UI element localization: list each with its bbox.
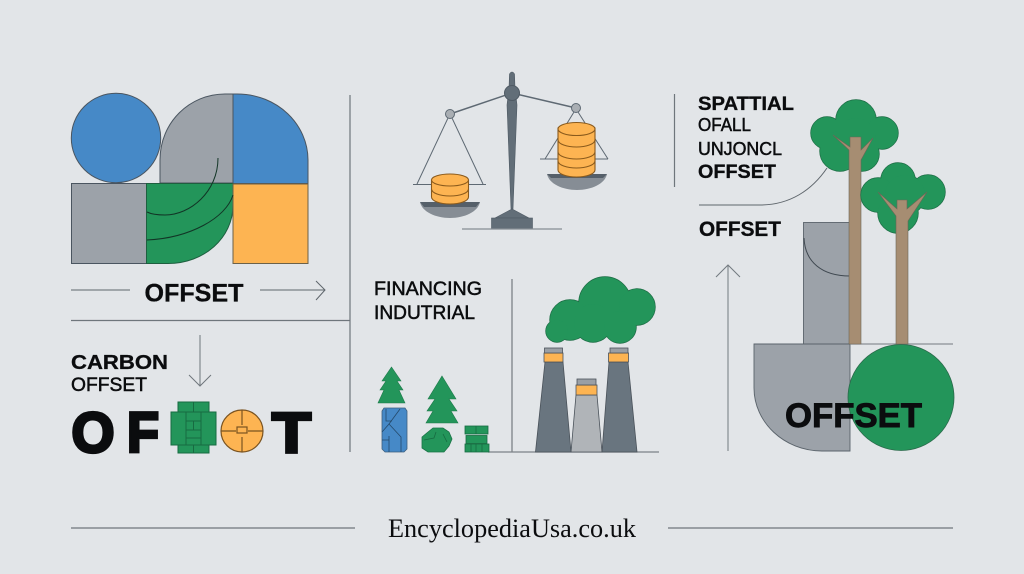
- divider beside heading: [674, 94, 676, 187]
- base: [495, 209, 529, 218]
- heading: spatial offset: UNJONCL: [698, 139, 782, 159]
- heading: spatial offset: [698, 93, 794, 183]
- post: [507, 72, 517, 209]
- blue quarter shape: [233, 94, 308, 184]
- icon: small tree one: [378, 367, 405, 403]
- label: offset large: OFFSET: [785, 397, 922, 435]
- heading: carbon offset: CARBON: [71, 352, 168, 374]
- yellow square: [233, 184, 308, 264]
- icon: green block: [171, 402, 216, 453]
- heading: carbon offset: [71, 352, 168, 396]
- heading: financing industrial: INDUTRIAL: [374, 303, 475, 324]
- heading: spatial offset: OFFSET: [698, 161, 776, 183]
- divider and ground line: [488, 279, 659, 452]
- panel: geometric shapes: [71, 93, 308, 264]
- pivot: [504, 86, 520, 100]
- icon: orange circle: [221, 410, 263, 452]
- heading: spatial offset: OFALL: [698, 115, 751, 135]
- heading: spatial offset: SPATTIAL: [698, 93, 794, 115]
- icon: tree one: [811, 100, 898, 344]
- footer site name: EncyclopediaUsa.co.uk: [388, 514, 636, 543]
- heading: financing industrial: [374, 279, 482, 324]
- curved connector: [699, 168, 827, 205]
- chimney middle: [571, 379, 602, 452]
- icon: blue block: [382, 408, 407, 452]
- heading: financing industrial: FINANCING: [374, 279, 482, 300]
- beam: [450, 93, 576, 114]
- arrow down: [189, 335, 211, 386]
- icon: shrub: [422, 428, 452, 452]
- heading: carbon offset: OFFSET: [71, 375, 147, 396]
- icon: factory chimneys: [536, 348, 637, 452]
- heading: offset: OFFSET: [144, 280, 244, 308]
- icon: large tree two: [426, 376, 458, 423]
- right pan: [540, 104, 608, 190]
- left pan: [413, 110, 486, 218]
- chimney left: [536, 348, 571, 452]
- chimney right: [602, 348, 637, 452]
- coins: [558, 122, 595, 177]
- arrow right: [260, 281, 325, 300]
- green circle: [848, 344, 954, 450]
- line left of offset: [71, 289, 130, 291]
- icon: green smoke cloud: [546, 277, 655, 343]
- label: offset: OFFSET: [699, 218, 781, 241]
- large word: OF..T: O: [72, 401, 114, 465]
- blue circle: [71, 93, 161, 183]
- green quarter shape: [146, 184, 233, 264]
- icon: green stack: [465, 426, 489, 452]
- icon: balance scale: [413, 72, 608, 229]
- gray building shapes: [754, 222, 850, 451]
- curved lines: [147, 158, 233, 240]
- large word: OF..T: F: [127, 401, 159, 465]
- arrow up: [716, 265, 740, 451]
- gray square: [72, 184, 146, 264]
- icon: tree two: [861, 163, 945, 344]
- large word: OF..T: T: [272, 401, 311, 465]
- gray arch: [160, 94, 233, 183]
- coins: [432, 174, 468, 204]
- large word: OF..T: [72, 401, 311, 465]
